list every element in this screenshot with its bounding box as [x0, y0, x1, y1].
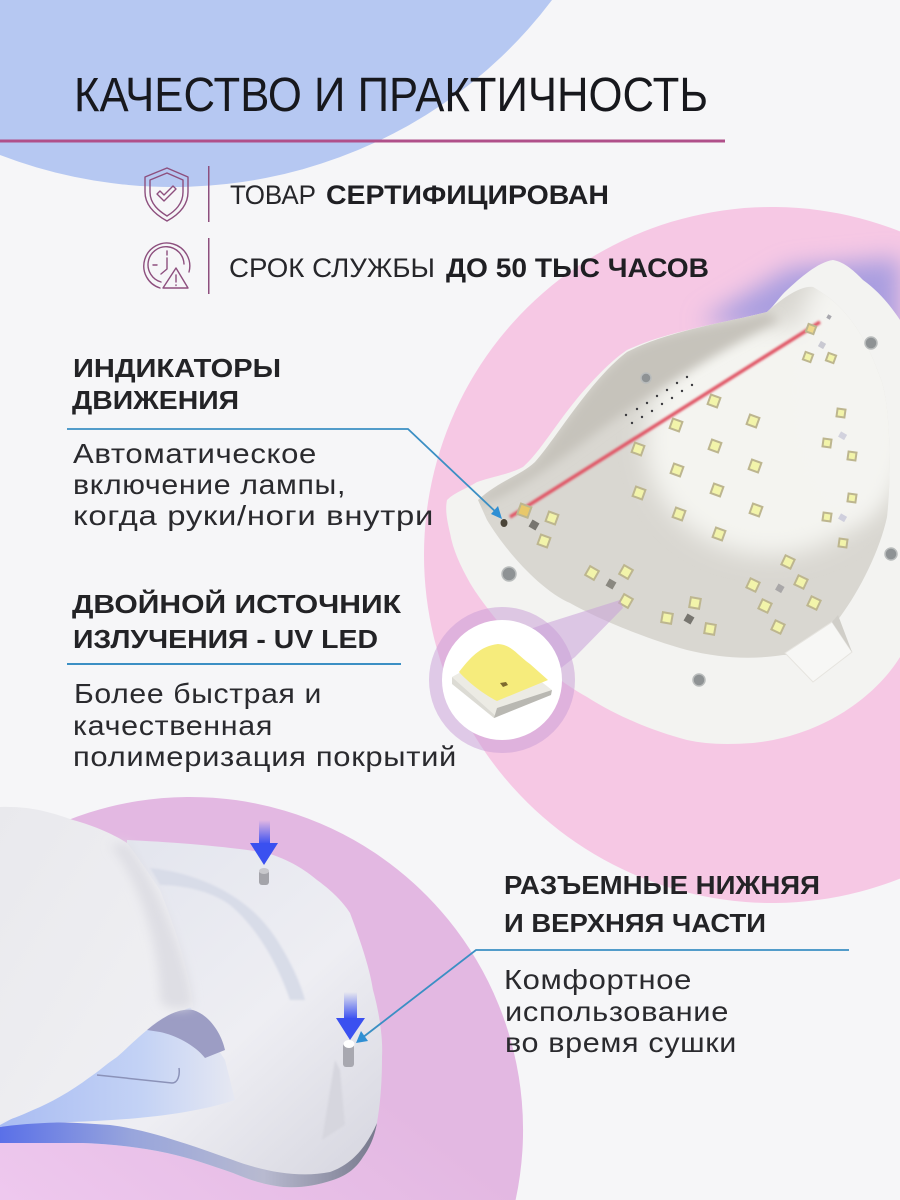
heading: [504, 870, 820, 938]
small components: [529, 314, 847, 624]
divider: [208, 238, 210, 294]
text block: detachable parts: [504, 870, 820, 1058]
description: [73, 438, 434, 531]
blue arrow: top peg: [250, 820, 278, 865]
lamp dome: [0, 807, 193, 1122]
description: когда руки/ноги внутри: [73, 500, 434, 531]
lamp basin: [478, 287, 890, 658]
description: качественная: [73, 710, 273, 741]
service life text: СРОК СЛУЖБЫ: [229, 253, 435, 283]
speaker holes: [625, 376, 693, 424]
magnifier ring: [429, 607, 575, 753]
dome shading: [110, 843, 193, 1009]
blue arrow: front peg: [336, 992, 365, 1040]
screws: [502, 337, 897, 686]
lamp base: [0, 840, 382, 1187]
title rule: [0, 140, 725, 142]
certificate row: [145, 166, 609, 222]
description: использование: [505, 996, 729, 1027]
service life text: [229, 253, 709, 283]
certificate text: СЕРТИФИЦИРОВАН: [326, 180, 609, 210]
heading rule: [67, 663, 401, 665]
heading: ИЗЛУЧЕНИЯ - UV LED: [73, 624, 378, 654]
lamp body: [446, 260, 900, 744]
heading: ИНДИКАТОРЫ: [73, 353, 281, 383]
motion sensor: [500, 519, 508, 527]
base inner track: [150, 868, 305, 1000]
pegs: [259, 868, 354, 1067]
lamp interior photo: [446, 260, 900, 744]
magnifier white disc: [442, 620, 562, 740]
text block: motion indicators: [72, 353, 434, 531]
magnifier cone: [500, 600, 623, 700]
description: [504, 964, 737, 1058]
heading: ДВОЙНОЙ ИСТОЧНИК: [72, 589, 401, 619]
LED chip close-up: [452, 644, 552, 718]
purple glow behind lamp: [700, 258, 900, 345]
description: полимеризация покрытий: [73, 741, 457, 772]
blue background circle: [0, 0, 552, 187]
description: Более быстрая и: [74, 678, 322, 709]
heading: [72, 589, 401, 654]
description: [73, 678, 457, 772]
icon: clock with warning: [144, 243, 190, 288]
floor slot: [97, 1068, 179, 1083]
LED magnifier callout: [429, 600, 623, 753]
pink background circle: [424, 207, 900, 903]
description: Автоматическое: [73, 438, 317, 469]
service life text: ДО 50 ТЫС ЧАСОВ: [446, 253, 709, 283]
certificate text: ТОВАР: [230, 180, 316, 210]
divider: [208, 166, 210, 222]
description: во время сушки: [505, 1027, 737, 1058]
pointer: connector pin: [356, 950, 849, 1043]
heading: РАЗЪЕМНЫЕ НИЖНЯЯ: [504, 870, 820, 900]
LED grid: [517, 324, 857, 635]
right base shadow: [322, 1060, 345, 1140]
blue floor under dome: [0, 1007, 235, 1127]
text block: dual UV LED source: [67, 589, 457, 772]
pointer: motion sensor: [67, 429, 502, 519]
description: Комфортное: [504, 964, 692, 995]
description: включение лампы,: [73, 469, 346, 500]
purple background circle: [0, 797, 523, 1200]
lamp release tab: [785, 622, 852, 682]
heading: И ВЕРХНЯЯ ЧАСТИ: [504, 908, 766, 938]
inner arch: [147, 1010, 225, 1058]
title: КАЧЕСТВО И ПРАКТИЧНОСТЬ: [74, 69, 708, 122]
icon: shield with check: [145, 168, 188, 221]
lamp side photo: [0, 807, 382, 1187]
service life row: [144, 238, 709, 294]
heading: [72, 353, 281, 415]
heading: ДВИЖЕНИЯ: [72, 385, 239, 415]
base underside lip: [0, 1122, 377, 1187]
red motion sensor beam: [510, 322, 820, 517]
